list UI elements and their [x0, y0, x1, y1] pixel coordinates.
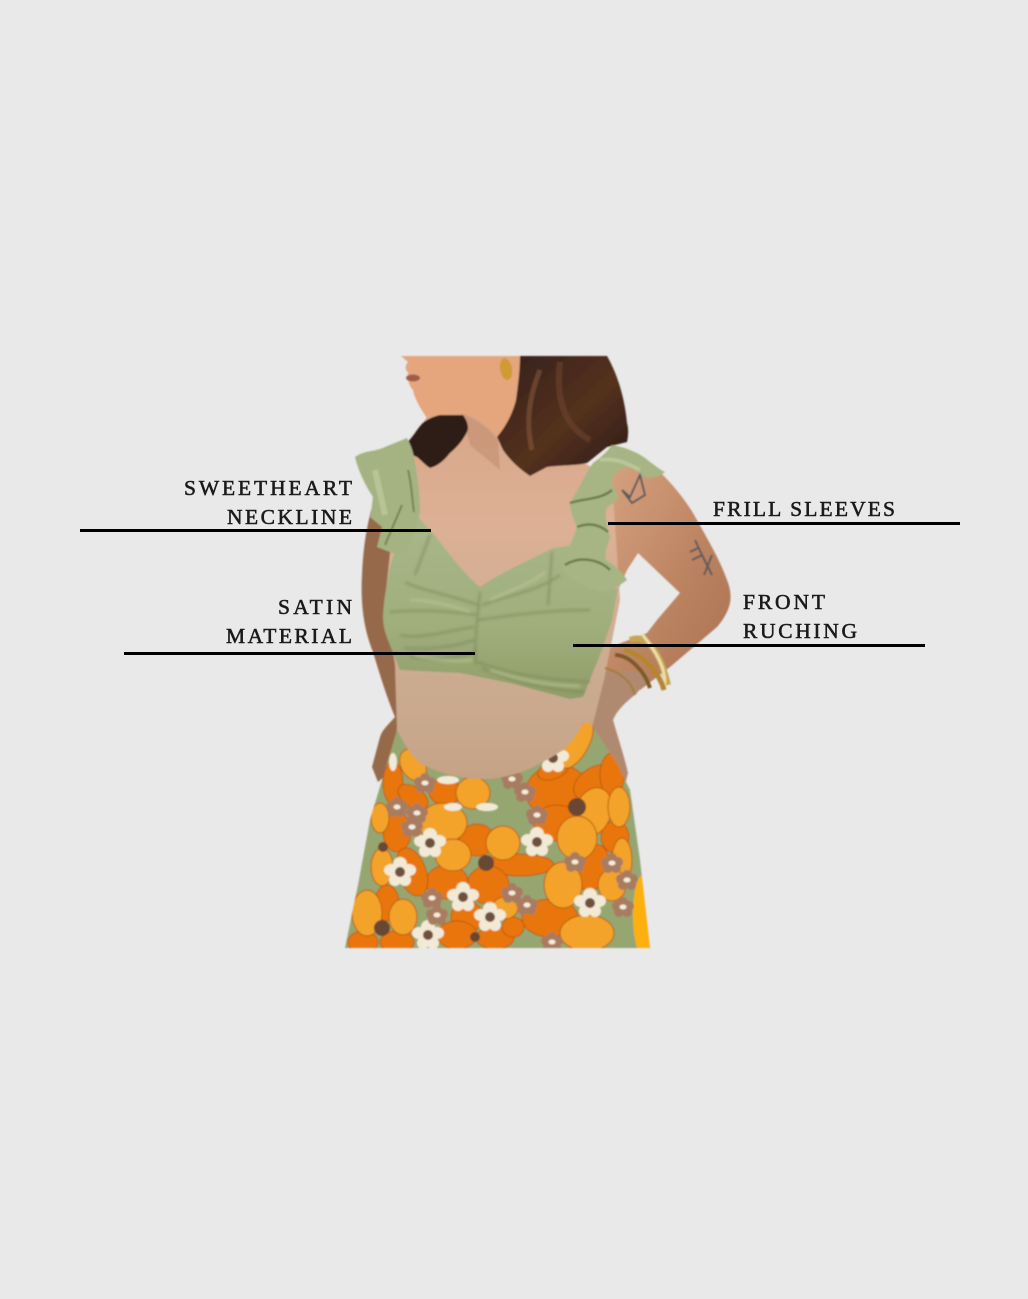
skin: arms and hands: [362, 448, 731, 793]
bangles: [605, 634, 668, 695]
crop top: [383, 517, 618, 699]
small cream flowers: [384, 743, 606, 949]
ruching folds: [390, 535, 590, 692]
satin highlights: [410, 572, 580, 686]
callout: frill sleeves: FRILL SLEEVES: [713, 497, 895, 521]
callout: sweetheart neckline: NECKLINE: [227, 505, 352, 529]
small brown flowers: [386, 769, 638, 952]
callout: front ruching: [573, 590, 925, 647]
orange and yellow petals: [348, 717, 653, 955]
skin: neck, chest and midriff: [385, 405, 620, 800]
right frill sleeve: [563, 445, 665, 592]
hair: [400, 356, 628, 476]
flower centres: [374, 798, 586, 942]
face: [401, 356, 530, 437]
lips: [406, 374, 420, 382]
earring: [498, 357, 514, 381]
cream waistband slivers: [389, 753, 498, 811]
callout: front ruching: RUCHING: [743, 619, 857, 643]
callout: front ruching: FRONT: [743, 590, 825, 614]
tattoos: [622, 475, 712, 575]
left frill sleeve: [355, 438, 420, 557]
callout: satin material: MATERIAL: [226, 624, 352, 648]
callout: satin material: [124, 595, 475, 655]
callout: satin material: SATIN: [278, 595, 352, 619]
callout: sweetheart neckline: SWEETHEART: [184, 476, 352, 500]
callout: frill sleeves: [608, 497, 960, 525]
callout: sweetheart neckline: [80, 476, 431, 532]
floral skirt: [340, 717, 655, 955]
photo: model wearing green top and floral skirt: [340, 356, 731, 955]
neck shadow: [462, 414, 500, 470]
